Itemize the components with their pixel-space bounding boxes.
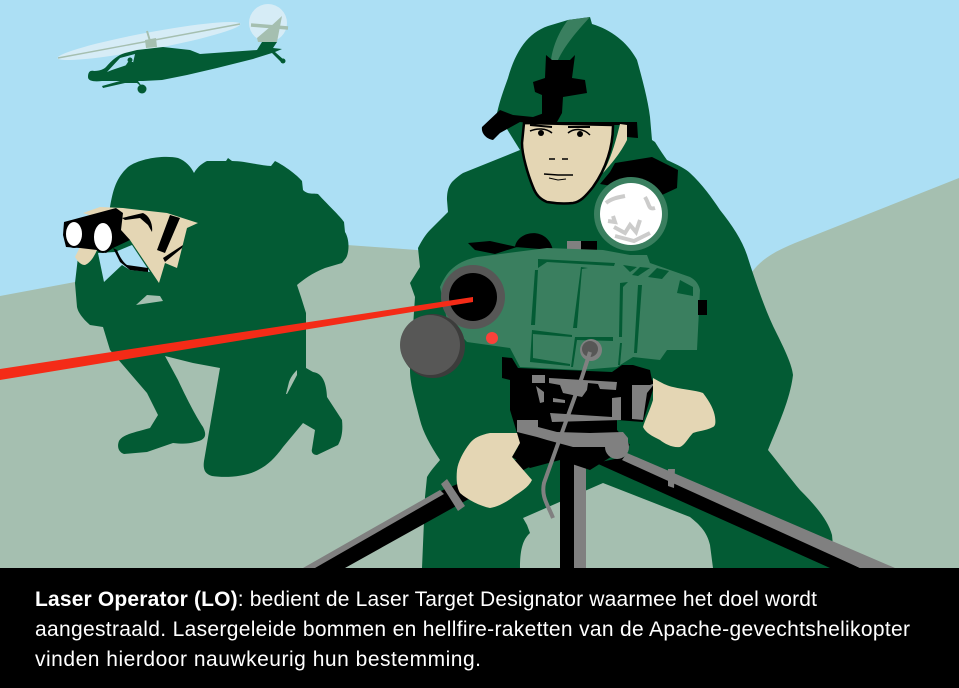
eyes, nose and mouth [530,125,590,180]
caption text [35,588,910,671]
body and helmet [410,17,835,568]
lens cap [400,314,465,378]
right hand [643,378,715,447]
gap between legs [520,483,713,568]
tripod left leg [303,457,548,568]
laser operator figure [303,17,895,568]
helicopter [56,4,288,94]
helmet stripe [551,17,590,60]
face [522,123,613,203]
arm gap [98,245,150,282]
black top pieces [468,233,553,254]
helmet mount [482,55,638,140]
face and hand [83,207,198,283]
soldier silhouette [75,157,348,477]
round scope [594,177,668,251]
caption text: vinden hierdoor nauwkeurig hun bestemming. [35,648,481,671]
background: hills [0,178,959,570]
binoculars [63,208,130,253]
cable [543,339,602,518]
soldier with binoculars [63,157,348,477]
left hand [457,433,532,508]
caption text: aangestraald. Lasergeleide bommen en hellfire-raketten van de Apache-gevechtshelikopter [35,618,910,641]
ear and neck [603,124,627,173]
laser target designator [440,248,707,370]
tripod centre leg [560,460,586,568]
shoulder strap [600,157,678,195]
caption text: Laser Operator (LO): bedient de Laser Target Designator waarmee het doel wordt [35,588,817,611]
laser beam [0,297,473,380]
camera mount [502,357,655,470]
tripod right leg [596,453,895,568]
caption panel [0,568,959,688]
straps [113,213,183,272]
